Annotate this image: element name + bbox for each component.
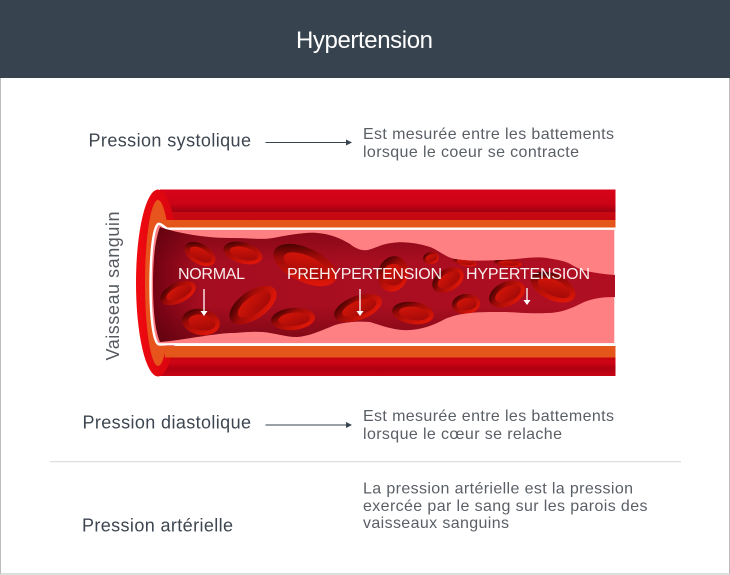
description: pression arterielle: vaisseaux sanguins — [363, 515, 509, 532]
vessel rim inner orange — [145, 200, 171, 366]
description: systolique — [363, 126, 614, 161]
vessel wall: bottom band — [160, 357, 616, 376]
label: pression systolique: Pression systolique — [88, 130, 251, 150]
stage label: normal: NORMAL — [178, 266, 245, 283]
description: systolique: Est mesurée entre les battements — [363, 126, 614, 143]
description: pression arterielle: La pression artérielle est la pression — [363, 480, 633, 498]
orange layer: top — [165, 220, 616, 228]
label: pression diastolique: Pression diastolique — [82, 412, 251, 432]
stage label: hypertension: HYPERTENSION — [466, 266, 590, 283]
vessel lumen (pink) with white lining — [150, 224, 616, 345]
label: pression arterielle: Pression artérielle — [82, 516, 233, 536]
orange layer: bottom — [165, 346, 616, 358]
blood flow shape — [153, 227, 615, 342]
header bar — [0, 0, 730, 78]
description: pression arterielle — [363, 480, 648, 532]
arrow: prehypertension — [356, 289, 364, 316]
stage label: prehypertension: PREHYPERTENSION — [287, 266, 442, 283]
arrow: systolique — [266, 140, 352, 146]
description: diastolique — [363, 408, 614, 443]
vessel wall: top band — [160, 190, 616, 220]
title: Hypertension — [296, 27, 433, 54]
red blood cells — [160, 242, 576, 336]
arrow: diastolique — [266, 422, 352, 428]
description: diastolique: Est mesurée entre les battements — [363, 408, 614, 425]
arrow: normal — [200, 289, 208, 316]
arrow: hypertension — [524, 288, 530, 305]
vessel rim — [136, 190, 180, 376]
description: pression arterielle: exercée par le sang sur les parois des — [363, 498, 648, 515]
blood vessel illustration — [136, 190, 616, 376]
vertical label: vaisseau sanguin: Vaisseau sanguin — [103, 212, 123, 360]
description: systolique: lorsque le coeur se contracte — [363, 144, 579, 161]
description: diastolique: lorsque le cœur se relache — [363, 426, 562, 443]
